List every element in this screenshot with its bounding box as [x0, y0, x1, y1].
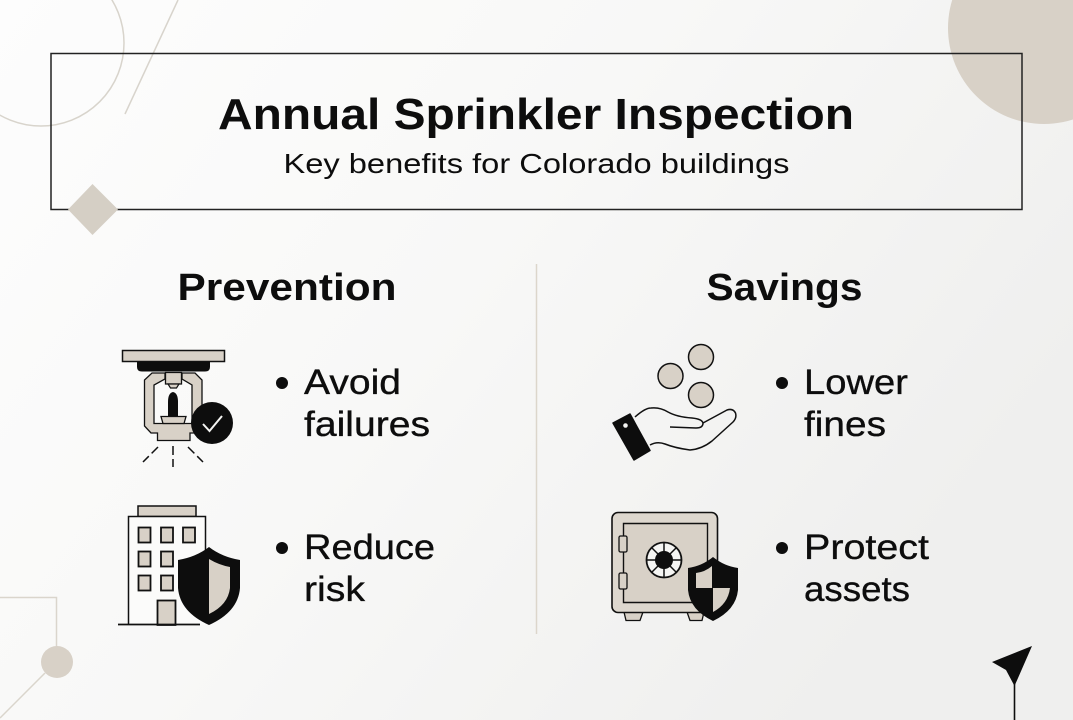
bullet: Lower fines: Lower — [804, 363, 908, 402]
bullet: Avoid failures: Avoid — [304, 363, 401, 402]
bullet: Protect assets: Protect — [804, 528, 929, 567]
decorative dot bottom left — [41, 646, 73, 678]
bullet: Protect assets — [776, 528, 929, 609]
bullet: Lower fines: fines — [804, 405, 886, 444]
bullet: Reduce risk — [276, 528, 435, 609]
bullet: Avoid failures: failures — [304, 405, 430, 444]
icon: sprinkler with check — [122, 350, 233, 467]
decorative corner lines bottom left — [0, 598, 56, 647]
icon: safe with shield — [612, 512, 738, 621]
decorative arc top left — [0, 0, 124, 126]
icon: hand with coins — [613, 344, 736, 460]
title box — [51, 54, 1022, 210]
decorative circle top right — [948, 0, 1073, 124]
bullet: Reduce risk: risk — [304, 570, 366, 609]
title: Annual Sprinkler Inspection — [218, 90, 854, 139]
bullet: Lower fines — [776, 363, 908, 444]
icon: arrow pointer bottom right — [992, 646, 1032, 720]
column divider — [536, 264, 538, 634]
heading: Prevention: Prevention — [178, 267, 396, 309]
bullet: Reduce risk: Reduce — [304, 528, 435, 567]
decorative diagonal line — [125, 0, 178, 114]
bullet: Avoid failures — [276, 363, 430, 444]
icon: building with shield — [118, 506, 240, 625]
heading: Savings: Savings — [706, 267, 862, 309]
bullet: Protect assets: assets — [804, 570, 910, 609]
subtitle: Key benefits for Colorado buildings — [284, 148, 790, 179]
decorative diamond — [68, 184, 118, 235]
